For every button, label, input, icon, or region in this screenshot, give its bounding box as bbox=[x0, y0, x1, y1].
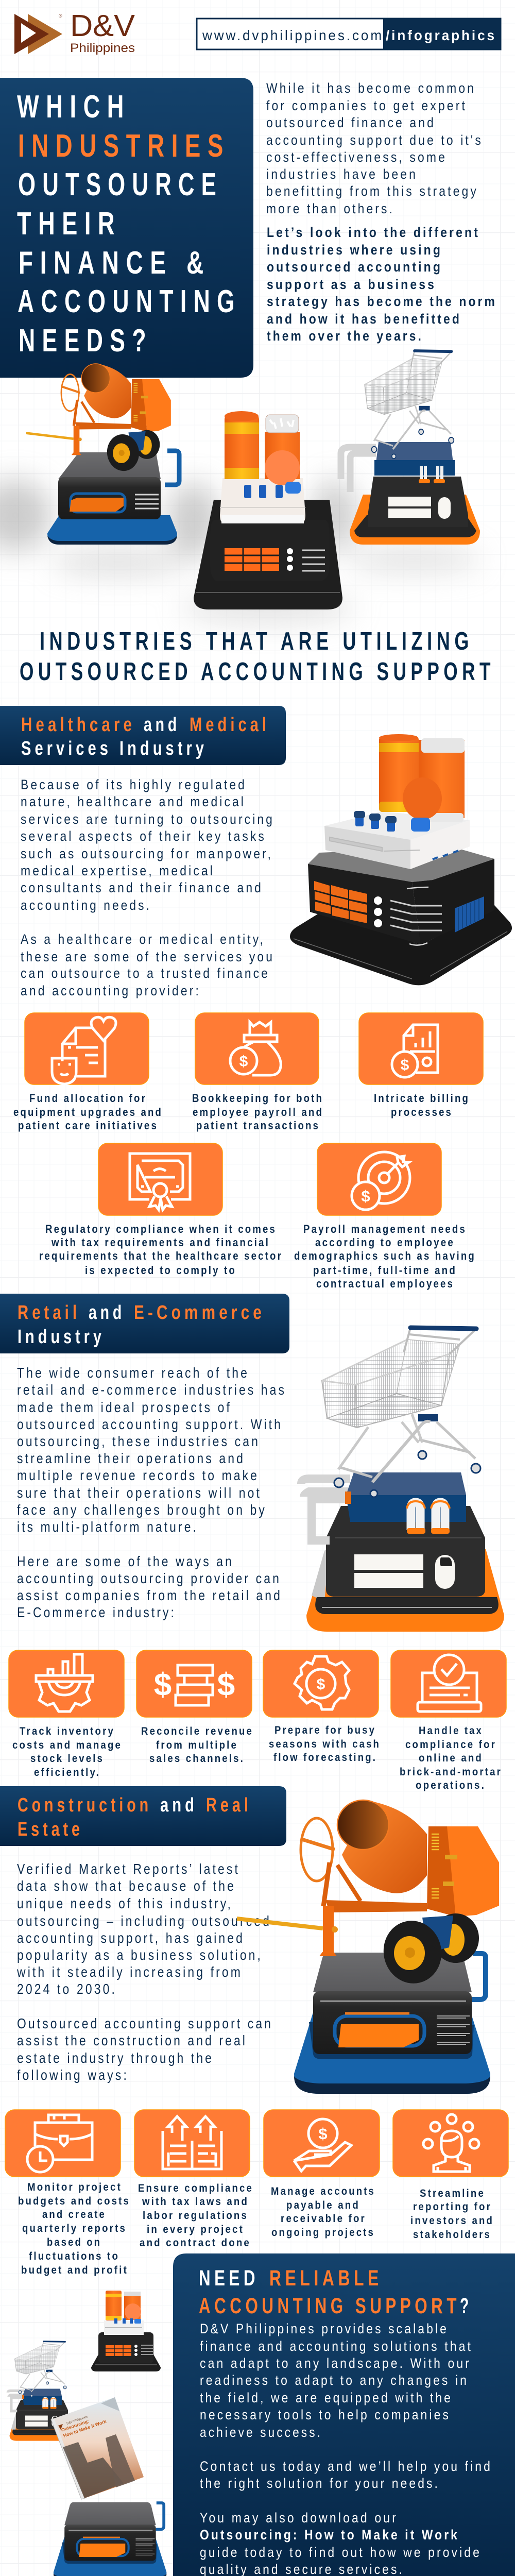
illustration: outsourcing guide book: D&V Philippines bbox=[66, 2415, 88, 2426]
illustration: small healthcare machine bbox=[91, 2291, 161, 2371]
panel: retail header: Retail bbox=[18, 1302, 80, 1324]
construction body text: Verified Market Reports’ latest bbox=[17, 1861, 240, 1877]
retail body text: E-Commerce industry: bbox=[17, 1604, 176, 1620]
construction card: project budgets: fluctuations to bbox=[29, 2250, 119, 2262]
construction card: reporting: Streamline bbox=[420, 2188, 485, 2199]
retail card: track inventory: stock levels bbox=[30, 1753, 104, 1765]
call to action heading bbox=[199, 2266, 472, 2318]
service card: payroll management: part-time, full-time and bbox=[313, 1264, 457, 1277]
service card: payroll management: Payroll management needs bbox=[303, 1223, 467, 1235]
service card: payroll management: contractual employees bbox=[316, 1277, 454, 1290]
illustration: outsourcing guide book: Outsourcing: bbox=[60, 2418, 90, 2433]
retail card: cash flow: flow forecasting. bbox=[273, 1752, 377, 1764]
construction card: accounts payable bbox=[264, 2110, 380, 2239]
healthcare body text: services are turning to outsourcing bbox=[21, 811, 274, 827]
construction card: project budgets bbox=[5, 2110, 130, 2276]
panel: retail header: E-Commerce bbox=[134, 1302, 265, 1324]
logo: D&V Philippines: D&V bbox=[70, 9, 135, 43]
service card: bookkeeping: Bookkeeping for both bbox=[192, 1092, 323, 1105]
panel: retail header bbox=[0, 1294, 289, 1353]
intro paragraph: more than others. bbox=[266, 201, 394, 216]
retail card: cash flow: seasons with cash bbox=[269, 1738, 381, 1750]
retail body text: outsourcing, these industries can bbox=[17, 1433, 260, 1449]
construction card: project budgets: based on bbox=[47, 2236, 101, 2248]
construction card: compliance: Ensure compliance bbox=[138, 2182, 253, 2194]
hero illustration: shopping cart machine bbox=[341, 351, 480, 545]
intro paragraph: While it has become common bbox=[266, 80, 476, 96]
panel: healthcare header: Healthcare bbox=[21, 714, 135, 736]
call to action body: finance and accounting solutions that bbox=[200, 2338, 473, 2354]
retail body text bbox=[17, 1365, 286, 1620]
retail card: reconcile revenue bbox=[136, 1650, 253, 1765]
call to action heading: ? bbox=[460, 2294, 472, 2318]
service card: regulatory compliance: Regulatory compliance when it comes bbox=[45, 1223, 277, 1235]
service card: payroll management: demographics such as having bbox=[294, 1249, 476, 1262]
illustration: concrete mixer machine bbox=[237, 1800, 499, 2094]
panel: healthcare header: Services Industry bbox=[21, 738, 208, 759]
panel: construction header: Real bbox=[206, 1794, 252, 1816]
retail card: tax compliance: compliance for bbox=[405, 1739, 496, 1751]
construction card: accounts payable: Manage accounts bbox=[271, 2185, 375, 2197]
retail body text: streamline their operations and bbox=[17, 1450, 245, 1466]
construction card: compliance: labor regulations bbox=[143, 2210, 248, 2222]
call to action body: necessary tools to help companies bbox=[200, 2407, 451, 2422]
illustration: outsourcing guide book bbox=[51, 2397, 144, 2499]
construction body text: with it steadily increasing from bbox=[16, 1964, 243, 1980]
healthcare body text: As a healthcare or medical entity, bbox=[21, 931, 265, 947]
service card: fund allocation bbox=[13, 1013, 163, 1132]
retail card: tax compliance: online and bbox=[419, 1752, 483, 1764]
service card: fund allocation: Fund allocation for bbox=[29, 1092, 147, 1105]
retail card: tax compliance: brick-and-mortar bbox=[400, 1766, 502, 1778]
service card: billing: $ bbox=[401, 1057, 409, 1074]
construction body text: Outsourced accounting support can bbox=[17, 2015, 273, 2031]
construction card: accounts payable: ongoing projects bbox=[271, 2227, 375, 2239]
retail card: track inventory: efficiently. bbox=[34, 1767, 100, 1778]
retail body text: The wide consumer reach of the bbox=[17, 1365, 249, 1381]
healthcare body text: consultants and their finance and bbox=[21, 880, 263, 895]
construction card: reporting: reporting for bbox=[413, 2201, 492, 2213]
healthcare body text: these are some of the services you bbox=[21, 949, 274, 964]
intro bold paragraph: Let’s look into the different bbox=[267, 225, 480, 240]
construction card: accounts payable: payable and bbox=[286, 2199, 360, 2211]
construction body text: accounting support, has gained bbox=[17, 1930, 245, 1946]
service card: billing: processes bbox=[391, 1106, 453, 1118]
panel: healthcare header: Medical bbox=[190, 714, 270, 736]
service card: regulatory compliance bbox=[39, 1143, 283, 1277]
construction card: reporting: stakeholders bbox=[413, 2229, 491, 2241]
construction card: reporting bbox=[393, 2110, 508, 2241]
illustration: shopping cart machine bbox=[301, 1328, 504, 1632]
url box bbox=[197, 18, 501, 50]
panel: healthcare header: and bbox=[144, 714, 180, 736]
service card: bookkeeping: employee payroll and bbox=[193, 1106, 323, 1118]
retail card: track inventory: Track inventory bbox=[20, 1725, 115, 1737]
intro bold paragraph: them over the years. bbox=[267, 328, 423, 344]
intro paragraph: for companies to get expert bbox=[266, 98, 467, 113]
panel: retail header: and bbox=[89, 1302, 125, 1324]
panel: main title: THEIR bbox=[17, 206, 122, 242]
construction card: project budgets: budgets and costs bbox=[18, 2195, 130, 2207]
construction card: project budgets: and create bbox=[42, 2209, 106, 2221]
retail card: reconcile revenue: Reconcile revenue bbox=[141, 1725, 253, 1737]
construction body text: assist the construction and real bbox=[17, 2032, 247, 2048]
construction card: compliance: with tax laws and bbox=[142, 2196, 249, 2208]
retail body text: accounting outsourcing provider can bbox=[17, 1570, 281, 1586]
illustration: healthcare machine bbox=[290, 734, 512, 985]
intro paragraph: accounting support due to it's bbox=[266, 132, 483, 148]
illustration: outsourcing guide book: How to Make it Work bbox=[62, 2419, 108, 2438]
retail card: cash flow: $ bbox=[317, 1676, 325, 1693]
panel: main title: WHICH bbox=[17, 89, 131, 125]
intro paragraph: benefitting from this strategy bbox=[266, 183, 478, 199]
retail body text: its multi-platform nature. bbox=[17, 1519, 198, 1535]
intro bold paragraph: and how it has benefitted bbox=[267, 311, 461, 327]
illustration: small shopping cart machine bbox=[8, 2342, 74, 2441]
retail card: reconcile revenue: from multiple bbox=[156, 1739, 238, 1751]
retail body text: Here are some of the ways an bbox=[17, 1553, 234, 1569]
panel: call to action bbox=[173, 2253, 515, 2576]
panel: main title bbox=[0, 78, 253, 378]
call to action body: readiness to adapt to any changes in bbox=[200, 2372, 469, 2388]
healthcare body text bbox=[21, 777, 274, 998]
retail body text: outsourced accounting support. With bbox=[17, 1416, 283, 1432]
panel: main title: FINANCE & bbox=[19, 245, 211, 281]
retail card: tax compliance: operations. bbox=[416, 1780, 486, 1791]
intro paragraph: industries have been bbox=[266, 166, 418, 182]
service card: regulatory compliance: is expected to comply to bbox=[85, 1264, 236, 1277]
retail card: tax compliance bbox=[391, 1650, 506, 1791]
retail card: reconcile revenue: $ bbox=[217, 1667, 235, 1703]
panel: healthcare header bbox=[0, 706, 286, 765]
intro bold paragraph: outsourced accounting bbox=[267, 259, 442, 275]
call to action heading: NEED bbox=[199, 2266, 259, 2291]
construction body text: data show that because of the bbox=[17, 1878, 236, 1894]
service card: billing bbox=[359, 1013, 483, 1118]
panel: construction header: Estate bbox=[18, 1819, 83, 1840]
construction card: compliance: in every project bbox=[147, 2224, 244, 2235]
url box: /infographics bbox=[386, 27, 496, 43]
hero illustration: healthcare machine bbox=[194, 411, 342, 609]
construction card: reporting: investors and bbox=[410, 2215, 494, 2227]
url box: www.dvphilippines.com bbox=[202, 27, 384, 43]
call to action body: the right solution for your needs. bbox=[200, 2476, 440, 2491]
retail body text: multiple revenue records to make bbox=[17, 1467, 259, 1483]
retail card: cash flow: Prepare for busy bbox=[274, 1724, 376, 1736]
intro paragraph: outsourced finance and bbox=[266, 115, 436, 130]
call to action body: You may also download our bbox=[200, 2510, 398, 2526]
illustration: small mixer machine base bbox=[54, 2502, 166, 2576]
healthcare body text: nature, healthcare and medical bbox=[21, 794, 246, 809]
construction body text bbox=[16, 1861, 273, 2083]
service card: bookkeeping bbox=[192, 1013, 323, 1132]
healthcare body text: Because of its highly regulated bbox=[21, 777, 247, 792]
panel: main title: ACCOUNTING bbox=[18, 284, 242, 319]
construction body text: popularity as a business solution, bbox=[17, 1947, 263, 1963]
construction body text: estate industry through the bbox=[17, 2050, 214, 2066]
healthcare body text: several aspects of their key tasks bbox=[21, 828, 266, 844]
logo: D&V Philippines: Philippines bbox=[70, 41, 135, 55]
logo: D&V Philippines bbox=[14, 9, 135, 55]
retail body text: face any challenges brought on by bbox=[17, 1502, 267, 1518]
service card: fund allocation: equipment upgrades and bbox=[13, 1106, 163, 1118]
call to action body: the field, we are equipped with the bbox=[200, 2390, 453, 2405]
construction card: accounts payable: receivable for bbox=[281, 2213, 366, 2225]
call to action body: D&V Philippines provides scalable bbox=[200, 2321, 449, 2336]
intro paragraph: cost-effectiveness, some bbox=[266, 149, 447, 165]
service card: payroll management: according to employee bbox=[315, 1236, 455, 1249]
call to action heading: RELIABLE bbox=[269, 2266, 383, 2291]
service card: billing: Intricate billing bbox=[374, 1092, 470, 1105]
intro bold paragraph: support as a business bbox=[267, 277, 436, 292]
panel: main title: INDUSTRIES bbox=[18, 128, 230, 164]
service card: payroll management bbox=[294, 1143, 476, 1290]
construction card: compliance: and contract done bbox=[140, 2237, 251, 2249]
soft shadows under hero machines bbox=[0, 479, 482, 622]
healthcare body text: can outsource to a trusted finance bbox=[21, 965, 270, 981]
section heading bbox=[20, 628, 495, 686]
panel: construction header: Construction bbox=[18, 1794, 152, 1816]
panel: main title: NEEDS? bbox=[19, 323, 153, 359]
retail body text: assist companies from the retail and bbox=[17, 1587, 282, 1603]
construction body text: following ways: bbox=[17, 2067, 129, 2083]
construction body text: 2024 to 2030. bbox=[17, 1981, 117, 1997]
construction card: project budgets: quarterly reports bbox=[22, 2223, 127, 2234]
healthcare body text: medical expertise, medical bbox=[21, 863, 215, 878]
service card: bookkeeping: patient transactions bbox=[196, 1119, 320, 1132]
call to action body: can adapt to any landscape. With our bbox=[200, 2355, 471, 2371]
call to action body: achieve success. bbox=[200, 2425, 322, 2440]
retail card: reconcile revenue: $ bbox=[154, 1667, 171, 1703]
call to action body bbox=[200, 2321, 492, 2576]
construction card: project budgets: budget and profit bbox=[21, 2264, 128, 2276]
hero illustration: concrete mixer machine bbox=[26, 364, 179, 545]
retail card: cash flow bbox=[263, 1650, 381, 1764]
logo: D&V Philippines: ® bbox=[59, 13, 62, 19]
service card: fund allocation: patient care initiatives bbox=[18, 1119, 158, 1132]
retail card: reconcile revenue: sales channels. bbox=[149, 1753, 245, 1765]
retail card: tax compliance: Handle tax bbox=[419, 1725, 483, 1737]
panel: construction header bbox=[0, 1786, 286, 1846]
construction body text: outsourcing – including outsourced bbox=[17, 1913, 271, 1929]
retail card: track inventory bbox=[9, 1650, 124, 1778]
call to action body: Outsourcing: How to Make it Work bbox=[200, 2527, 459, 2543]
retail body text: retail and e-commerce industries has bbox=[17, 1382, 286, 1398]
retail card: track inventory: costs and manage bbox=[12, 1739, 122, 1751]
intro bold paragraph: industries where using bbox=[267, 242, 442, 258]
healthcare body text: such as outsourcing for manpower, bbox=[21, 846, 273, 861]
service card: payroll management: $ bbox=[361, 1187, 370, 1205]
panel: main title: OUTSOURCE bbox=[18, 167, 223, 202]
service card: regulatory compliance: with tax requirements and financial bbox=[51, 1236, 270, 1249]
panel: construction header: and bbox=[160, 1794, 198, 1816]
service card: bookkeeping: $ bbox=[239, 1053, 248, 1070]
retail body text: made them ideal prospects of bbox=[17, 1399, 232, 1415]
healthcare body text: and accounting provider: bbox=[21, 983, 201, 998]
intro paragraph bbox=[266, 80, 483, 216]
intro bold paragraph bbox=[267, 225, 497, 344]
panel: retail header: Industry bbox=[18, 1326, 105, 1348]
healthcare body text: accounting needs. bbox=[21, 897, 151, 913]
construction body text: unique needs of this industry, bbox=[17, 1895, 233, 1911]
retail body text: sure that their operations will not bbox=[17, 1485, 262, 1501]
construction card: project budgets: Monitor project bbox=[27, 2181, 122, 2193]
construction card: accounts payable: $ bbox=[318, 2125, 328, 2143]
construction card: compliance bbox=[134, 2110, 253, 2249]
service card: regulatory compliance: requirements that the healthcare sector bbox=[39, 1249, 283, 1262]
